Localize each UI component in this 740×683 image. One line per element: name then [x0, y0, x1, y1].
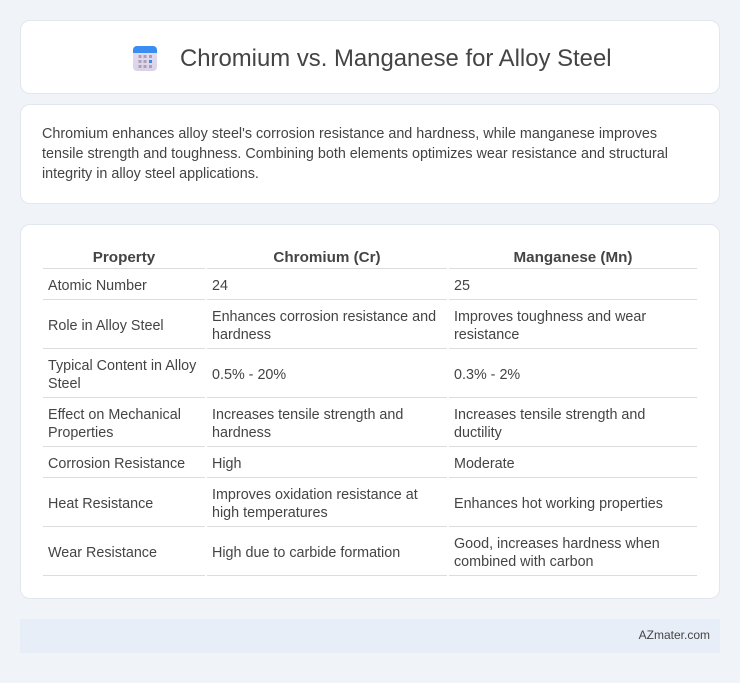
row: effect on mechanical properties: ductility: [454, 425, 502, 441]
row: role in alloy steel: resistance: [454, 327, 519, 343]
row: atomic number: [48, 278, 470, 294]
panel: title card: [20, 20, 720, 94]
row: wear resistance: combined with carbon: [454, 554, 594, 570]
row: typical content: Steel: [48, 376, 81, 392]
summary text: integrity in alloy steel applications.: [42, 166, 259, 182]
row: corrosion resistance: Corrosion Resistance: [48, 456, 185, 472]
row: role in alloy steel: Improves toughness and wear: [454, 309, 646, 325]
row: effect on mechanical properties: [48, 407, 645, 441]
row: role in alloy steel: Role in Alloy Steel: [48, 318, 164, 334]
summary text: Chromium enhances alloy steel's corrosion resistance and hardness, while manganese improves: [42, 126, 657, 142]
table header: manganese: Manganese (Mn): [514, 249, 632, 266]
row: heat resistance: Enhances hot working properties: [454, 496, 663, 512]
footer credit: AZmater.com: [639, 628, 710, 642]
table header: property: Property: [93, 249, 155, 266]
row: typical content: 0.5% - 20%: [212, 367, 286, 383]
table background card: [20, 224, 720, 599]
row: role in alloy steel: [48, 309, 646, 343]
row: wear resistance: High due to carbide formation: [212, 545, 400, 561]
row: effect on mechanical properties: Increases tensile strength and: [454, 407, 645, 423]
row: wear resistance: Good, increases hardness when: [454, 536, 660, 552]
row: effect on mechanical properties: Increases tensile strength and: [212, 407, 403, 423]
title: Chromium vs. Manganese for Alloy Steel: [180, 45, 612, 72]
row: corrosion resistance: Moderate: [454, 456, 515, 472]
summary text: tensile strength and toughness. Combining both elements optimizes wear resistance and structural: [42, 146, 668, 162]
row: effect on mechanical properties: hardness: [212, 425, 271, 441]
row: wear resistance: [48, 536, 660, 570]
row: atomic number: 24: [212, 278, 228, 294]
table header: chromium: Chromium (Cr): [273, 249, 381, 266]
row: typical content: [48, 358, 520, 392]
row: effect on mechanical properties: Properties: [48, 425, 113, 441]
row: atomic number: Atomic Number: [48, 278, 147, 294]
row: heat resistance: Heat Resistance: [48, 496, 153, 512]
footer bar: [20, 619, 720, 653]
row: corrosion resistance: High: [212, 456, 242, 472]
row: heat resistance: Improves oxidation resistance at: [212, 487, 418, 503]
panel: summary: [20, 104, 720, 204]
row: role in alloy steel: hardness: [212, 327, 271, 343]
summary text: [42, 126, 668, 182]
row: corrosion resistance: [48, 456, 515, 472]
row: typical content: 0.3% - 2%: [454, 367, 520, 383]
row: heat resistance: [48, 487, 663, 521]
row: role in alloy steel: Enhances corrosion resistance and: [212, 309, 436, 325]
icon: calendar grid: [133, 46, 157, 71]
row: wear resistance: Wear Resistance: [48, 545, 157, 561]
row: effect on mechanical properties: Effect on Mechanical: [48, 407, 181, 423]
row: typical content: Typical Content in Alloy: [48, 358, 196, 374]
row: heat resistance: high temperatures: [212, 505, 328, 521]
row: atomic number: 25: [454, 278, 470, 294]
